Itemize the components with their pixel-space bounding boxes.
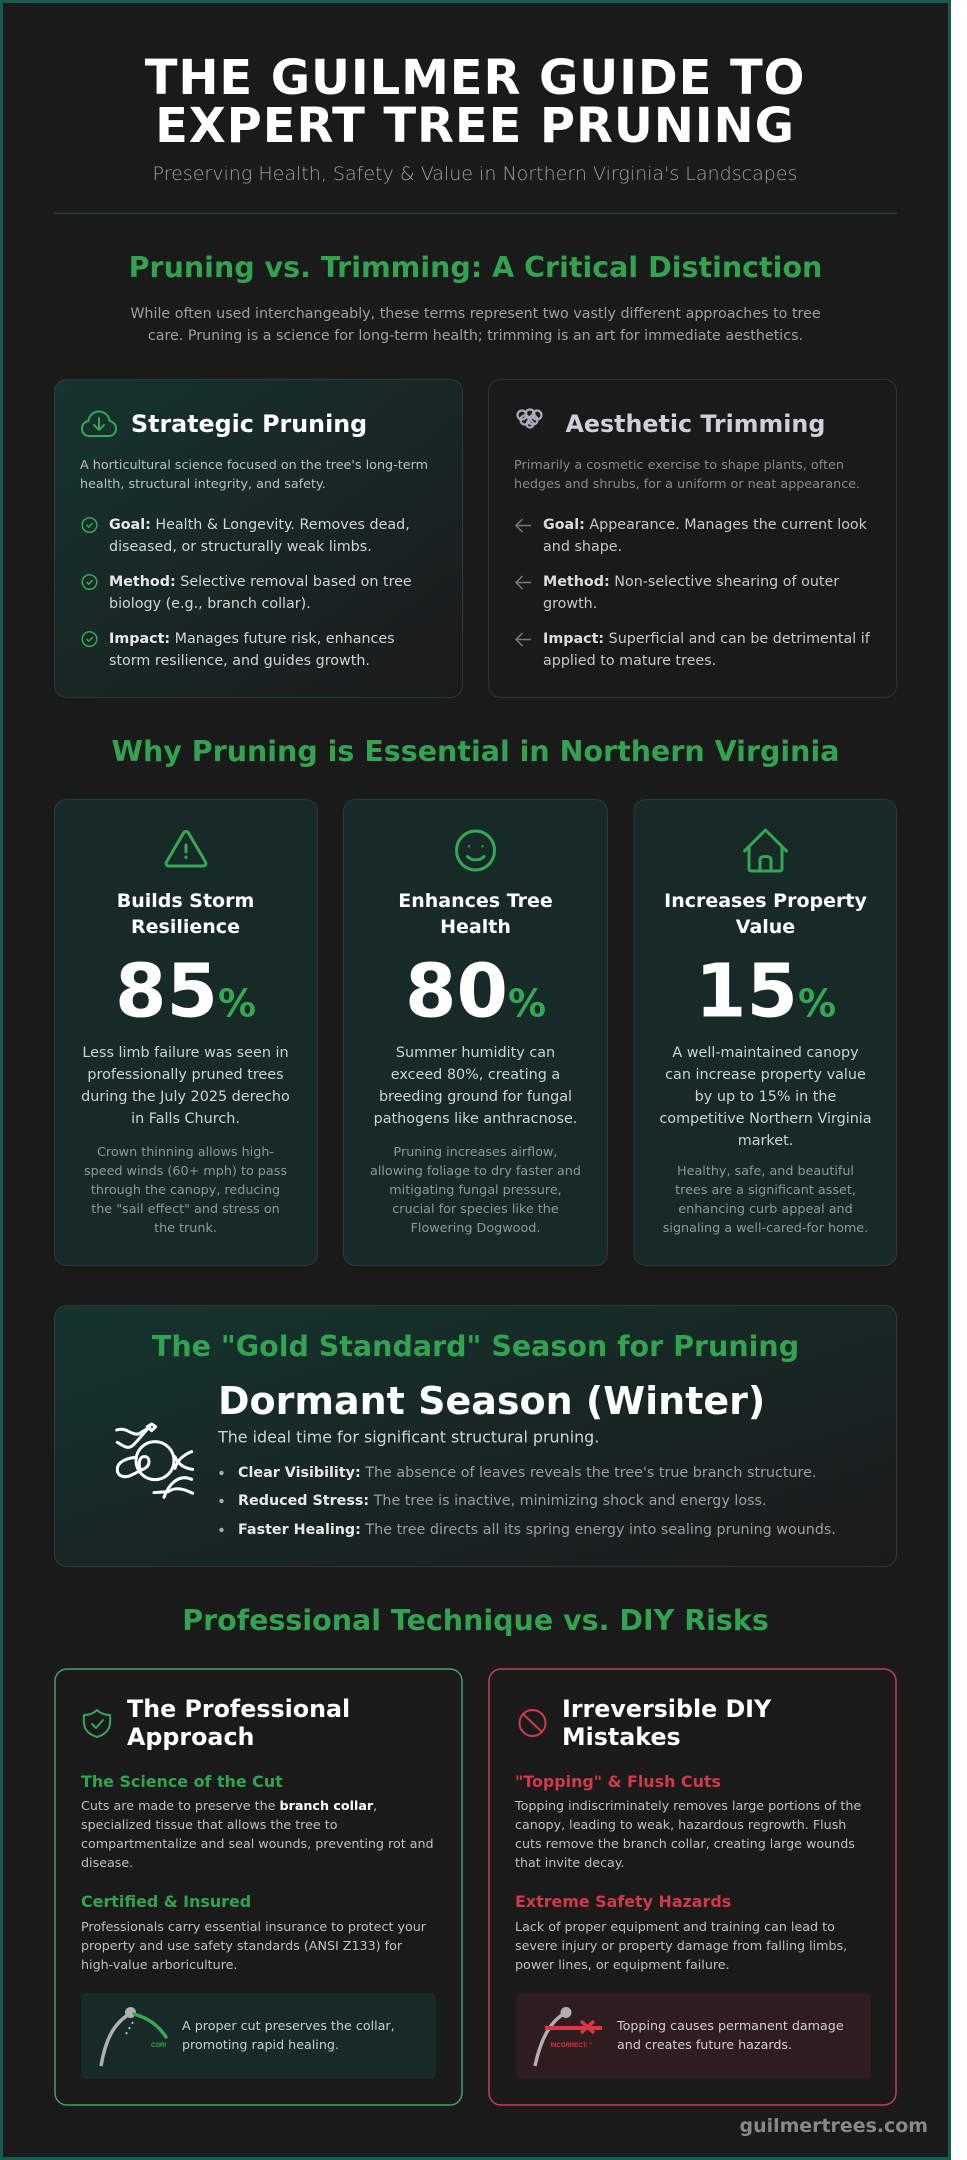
season title: Dormant Season (Winter)	[218, 1379, 765, 1423]
heading: Health	[440, 916, 511, 938]
detail text: Crown thinning allows high-	[97, 1145, 274, 1160]
text: topping	[514, 1798, 861, 1870]
season subtitle: The ideal time for significant structural pruning.	[217, 1428, 599, 1446]
icon: house	[744, 830, 786, 871]
list item: goal	[516, 517, 868, 555]
benefit list: Clear Visibility: The absence of leaves reveals the tree's true branch structure.	[238, 1465, 816, 1481]
body text: market.	[738, 1133, 793, 1149]
body text: during the July 2025 derecho	[81, 1089, 290, 1105]
list item: method: Method: Non-selective shearing of outer	[543, 574, 839, 590]
text: science of the cut: compartmentalize and seal wounds, preventing rot and	[81, 1836, 434, 1851]
heading: Increases Property	[664, 890, 867, 912]
panel: property value	[634, 800, 896, 1266]
list item: impact: Impact: Manages future risk, enhances	[109, 631, 395, 647]
diagram: correct cut	[101, 2007, 166, 2066]
intro text: While often used interchangeably, these terms represent two vastly different approaches to tree	[130, 306, 821, 322]
heading: Enhances Tree	[398, 890, 553, 912]
diagram: incorrect cut	[535, 2007, 602, 2066]
benefit list: Reduced Stress: The tree is inactive, minimizing shock and energy loss.	[238, 1493, 767, 1509]
caption	[182, 2018, 395, 2052]
description: Primarily a cosmetic exercise to shape plants, often	[514, 458, 844, 473]
panel: aesthetic trimming	[488, 380, 896, 698]
panel: strategic pruning	[54, 380, 462, 698]
detail text	[84, 1145, 287, 1236]
icon: prohibited	[520, 1710, 546, 1736]
stat: 15%: 15%	[695, 948, 836, 1034]
description: hedges and shrubs, for a uniform or neat appearance.	[514, 477, 860, 492]
icon: cloud download	[82, 412, 116, 436]
detail text	[663, 1164, 868, 1236]
body text: Summer humidity can	[396, 1045, 555, 1061]
header	[145, 50, 805, 185]
body text: exceed 80%, creating a	[391, 1067, 560, 1083]
description: health, structural integrity, and safety.	[80, 477, 326, 492]
detail text: Flowering Dogwood.	[411, 1221, 540, 1236]
text: topping: Topping indiscriminately removes large portions of the	[514, 1798, 861, 1813]
heading	[664, 890, 867, 938]
icon: warning triangle	[166, 832, 206, 866]
icon: smile	[456, 831, 494, 870]
list item: goal: Goal: Appearance. Manages the current look	[543, 517, 868, 533]
text: science of the cut: Cuts are made to preserve the branch collar,	[81, 1798, 377, 1813]
heading: Strategic Pruning	[131, 410, 367, 438]
text: certified: high-value arboriculture.	[81, 1957, 237, 1972]
caption: promoting rapid healing.	[182, 2037, 339, 2052]
list item: impact	[516, 631, 871, 669]
stat: 85%: 85%	[115, 948, 256, 1034]
body text: A well-maintained canopy	[672, 1045, 859, 1061]
body text: breeding ground for fungal	[379, 1089, 572, 1105]
benefit list	[219, 1465, 836, 1538]
detail text: the trunk.	[154, 1221, 217, 1236]
heading	[127, 1695, 350, 1751]
subheading: topping: "Topping" & Flush Cuts	[515, 1772, 721, 1791]
body text: by up to 15% in the	[695, 1089, 836, 1105]
heading	[398, 890, 553, 938]
detail text: signaling a well-cared-for home.	[663, 1221, 868, 1236]
benefit list: Faster Healing: The tree directs all its spring energy into sealing pruning wounds.	[238, 1522, 836, 1538]
detail text	[370, 1145, 581, 1236]
diagram: correct cut: CORI	[151, 2043, 166, 2049]
body text: competitive Northern Virginia	[659, 1111, 872, 1127]
text: topping: canopy, leading to weak, hazardous regrowth. Flush	[515, 1817, 846, 1832]
text: certified	[81, 1919, 427, 1972]
list item: goal: and shape.	[543, 539, 622, 555]
detail text: enhancing curb appeal and	[678, 1202, 853, 1217]
text: safety hazards: severe injury or property damage from falling limbs,	[515, 1938, 847, 1953]
list item: method: growth.	[543, 596, 597, 612]
text: safety hazards: Lack of proper equipment and training can lead to	[515, 1919, 835, 1934]
heading: Value	[736, 916, 795, 938]
subheading: science of the cut: The Science of the Cut	[81, 1772, 283, 1791]
body text: professionally pruned trees	[87, 1067, 284, 1083]
heading: Resilience	[131, 916, 240, 938]
heading: Builds Storm	[117, 890, 254, 912]
callout: proper cut	[81, 1993, 436, 2079]
list item: impact: applied to mature trees.	[543, 653, 716, 669]
header: EXPERT TREE PRUNING	[155, 98, 795, 154]
body text: in Falls Church.	[131, 1111, 240, 1127]
text: science of the cut: disease.	[81, 1855, 133, 1870]
detail text: Healthy, safe, and beautiful	[677, 1164, 854, 1179]
panel: diy mistakes	[489, 1669, 896, 2105]
list item: goal: Goal: Health & Longevity. Removes dead,	[109, 517, 410, 533]
description	[80, 458, 428, 492]
body text: pathogens like anthracnose.	[374, 1111, 577, 1127]
list item: method	[516, 574, 839, 612]
heading	[562, 1695, 772, 1751]
stat: 80%: 80%	[405, 948, 546, 1034]
caption: Topping causes permanent damage	[616, 2018, 844, 2033]
description: A horticultural science focused on the tree's long-term	[80, 458, 428, 473]
diagram: incorrect cut: INCORRECT: "	[550, 2043, 592, 2049]
list item: goal: diseased, or structurally weak limbs.	[109, 539, 372, 555]
text: topping: cuts remove the branch collar, creating large wounds	[515, 1836, 855, 1851]
detail text: speed winds (60+ mph) to pass	[84, 1164, 287, 1179]
heading	[117, 890, 254, 938]
subtitle: Preserving Health, Safety & Value in Northern Virginia's Landscapes	[153, 163, 797, 185]
panel: gold standard season	[54, 1306, 896, 1566]
caption: A proper cut preserves the collar,	[182, 2018, 395, 2033]
text: science of the cut	[81, 1798, 434, 1870]
panel: professional approach	[55, 1669, 462, 2105]
heading: Irreversible DIY	[562, 1695, 772, 1723]
caption: and creates future hazards.	[617, 2037, 792, 2052]
list item: impact: storm resilience, and guides growth.	[109, 653, 370, 669]
list item: goal	[82, 517, 410, 555]
text: safety hazards	[515, 1919, 847, 1972]
detail text: crucial for species like the	[392, 1202, 559, 1217]
body text	[659, 1045, 872, 1149]
detail text: trees are a significant asset,	[675, 1183, 856, 1198]
intro text: care. Pruning is a science for long-term health; trimming is an art for immediate aesthetics.	[148, 328, 803, 344]
intro text	[130, 306, 821, 344]
detail text: allowing foliage to dry faster and	[370, 1164, 581, 1179]
footer url: guilmertrees.com	[740, 2115, 928, 2137]
text: certified: Professionals carry essential insurance to protect your	[81, 1919, 427, 1934]
list item: method: biology (e.g., branch collar).	[109, 596, 311, 612]
section heading: technique vs risks: Professional Technique vs. DIY Risks	[182, 1604, 769, 1637]
detail text: the "sail effect" and stress on	[91, 1202, 280, 1217]
list item: impact: Impact: Superficial and can be detrimental if	[543, 631, 871, 647]
text: safety hazards: power lines, or equipment failure.	[515, 1957, 730, 1972]
detail text: Pruning increases airflow,	[394, 1145, 557, 1160]
section heading: why pruning: Why Pruning is Essential in Northern Virginia	[112, 735, 839, 768]
icon: shield check	[84, 1710, 110, 1737]
heading: The Professional	[127, 1695, 350, 1723]
icon: dormant tree scribble	[117, 1424, 193, 1497]
description	[514, 458, 860, 492]
heading: Mistakes	[562, 1723, 681, 1751]
text: certified: property and use safety standards (ANSI Z133) for	[81, 1938, 403, 1953]
body text: Less limb failure was seen in	[82, 1045, 289, 1061]
text: topping: that invite decay.	[515, 1855, 625, 1870]
panel: tree health	[344, 800, 608, 1266]
section heading: pruning vs trimming: Pruning vs. Trimming: A Critical Distinction	[129, 251, 822, 284]
subheading: certified: Certified & Insured	[81, 1892, 251, 1911]
body text	[81, 1045, 290, 1127]
icon: shears scribble	[518, 410, 542, 428]
panel: storm resilience	[54, 800, 318, 1266]
detail text: through the canopy, reducing	[91, 1183, 280, 1198]
list item: method	[82, 574, 412, 612]
text: science of the cut: specialized tissue that allows the tree to	[81, 1817, 338, 1832]
title: THE GUILMER GUIDE TO	[145, 50, 805, 106]
body text	[374, 1045, 577, 1127]
body text: can increase property value	[665, 1067, 866, 1083]
heading: The "Gold Standard" Season for Pruning	[152, 1330, 799, 1363]
heading: Aesthetic Trimming	[566, 410, 825, 438]
list item: method: Method: Selective removal based on tree	[109, 574, 412, 590]
list item: impact	[82, 631, 395, 669]
subheading: safety hazards: Extreme Safety Hazards	[515, 1892, 731, 1911]
callout: topping	[516, 1993, 871, 2079]
caption	[616, 2018, 844, 2052]
detail text: mitigating fungal pressure,	[389, 1183, 562, 1198]
heading: Approach	[127, 1723, 254, 1751]
